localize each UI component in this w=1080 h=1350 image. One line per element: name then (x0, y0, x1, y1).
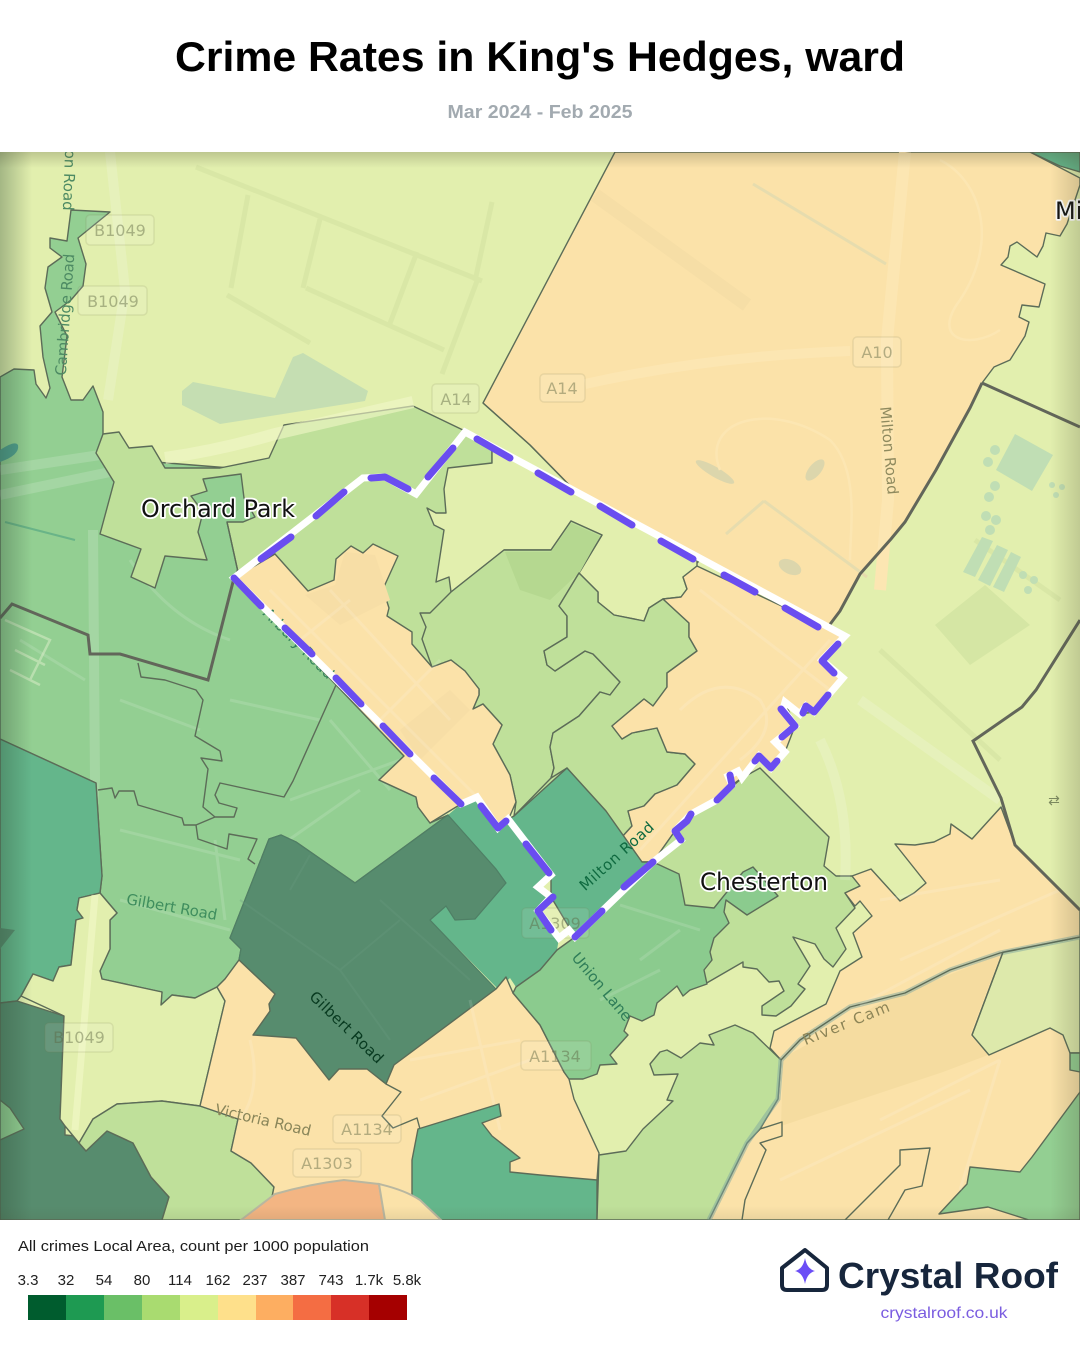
area: pale B1049 strip (21, 893, 225, 1143)
road shield: A1303: A1303 (301, 1154, 353, 1173)
area: Chesterton light-green block (653, 768, 860, 1016)
road labels (45, 215, 901, 1177)
area: south light-green block (79, 1101, 274, 1220)
area: northern ward pale lobe (427, 447, 697, 621)
place label: Chesterton: Chesterton (700, 868, 828, 896)
area: small medium-green patch (0, 1100, 24, 1140)
legend values: 1.7k (355, 1272, 384, 1289)
road shield: A1303 (293, 1149, 361, 1177)
road name: River Cam: River Cam (800, 998, 892, 1049)
legend values: 32 (58, 1272, 74, 1289)
legend values: 162 (205, 1272, 231, 1289)
boundary: thin line beside the A14 (483, 403, 579, 495)
subtitle: date range: Mar 2024 - Feb 2025 (448, 102, 632, 122)
legend (18, 1238, 422, 1320)
legend heading: All crimes Local Area, count per 1000 population (18, 1238, 369, 1255)
road shield: A14 east: A14 (546, 379, 578, 398)
legend values: 5.8k (393, 1272, 422, 1289)
map features: Union Lane street lines (600, 905, 700, 1000)
area: lower light-green block along the river (597, 1025, 781, 1220)
area: eastern ward orange block (612, 566, 845, 862)
area: teal west edge (0, 739, 102, 1003)
map base: lightest area (0, 152, 1080, 1220)
map feature: River Cam (709, 937, 1080, 1220)
road shield: A14 east (540, 374, 585, 402)
map features: fields and water in the north (108, 152, 1065, 760)
area: darker river meadow (781, 954, 1001, 1126)
area: south-east orange meadow block (709, 807, 1080, 1220)
panel: choropleth map (0, 149, 1080, 1220)
boundary: purple dashes (234, 439, 838, 937)
legend values (18, 1272, 422, 1289)
area: darker patch in central block (505, 523, 600, 600)
map features: east pale roads (820, 700, 1000, 880)
road name: top-left road fragment: on Road (59, 149, 79, 211)
area: south boundary line (382, 1084, 420, 1129)
place label: Orchard Park: Orchard Park (141, 495, 295, 523)
map features: western roads (0, 443, 400, 932)
area: Orchard Park light-green region (95, 405, 700, 664)
map features: south-east thin outlines (742, 952, 1003, 1220)
map features: B1049 road band (75, 895, 95, 1130)
map edge vignette (0, 152, 1080, 1220)
area: small green block at east edge (1070, 1053, 1080, 1072)
area: pale block east of the meadow (972, 937, 1080, 1055)
road name: Union Lane: Union Lane (568, 949, 636, 1025)
area: teal top-right corner (1030, 152, 1080, 172)
area: south-west dark block (0, 1001, 169, 1220)
legend values: 387 (280, 1272, 306, 1289)
map features: south orange roads (240, 1000, 530, 1130)
area: small dark patch west edge (0, 928, 15, 949)
road shield: A1134 south (333, 1115, 401, 1143)
area: south teal block (412, 1104, 597, 1220)
legend values: 114 (168, 1272, 192, 1289)
logo url: crystalroof.co.uk (880, 1305, 1009, 1322)
road shield: B1049 south (45, 1023, 113, 1052)
area: western ward orange block (234, 544, 516, 828)
icon: railway marker: ⇄ (1048, 792, 1060, 808)
legend colour scale (28, 1295, 407, 1320)
area: peach circle at the bottom edge (241, 1180, 385, 1220)
road shield: A10: A10 (861, 343, 893, 362)
road name: Victoria Road: Victoria Road (213, 1100, 313, 1140)
area: central light-green block in ward (530, 773, 560, 800)
road shield: A1309 (522, 908, 589, 938)
road name: Gilbert Road in dark block: Gilbert Road (306, 988, 387, 1067)
road shield: B1049 south: B1049 (53, 1028, 105, 1047)
area: dark green highest-band block (230, 815, 506, 1084)
area: south-east medium-green block (939, 1092, 1080, 1220)
road name: Arbury Road: Arbury Road (259, 604, 338, 683)
area: Union Lane medium-green block (513, 862, 778, 1079)
road shield: A10 (853, 337, 901, 367)
logo wordmark: Crystal Roof (838, 1255, 1059, 1296)
area: central teal block (508, 768, 653, 937)
boundary: thin internal lines west (98, 522, 336, 864)
road shield: A1134 centre: A1134 (529, 1047, 581, 1066)
ward boundary: King's Hedges (234, 432, 845, 938)
map features: eastern ward roads (640, 590, 830, 850)
map features: orange block texture (270, 552, 480, 800)
area: eastern light-green block (544, 573, 697, 837)
road name: Gilbert Road west: Gilbert Road (125, 890, 219, 924)
road shield: A14 west (432, 384, 479, 413)
icon: house with star (782, 1250, 827, 1290)
map features: north-east block roads and canals (585, 152, 1000, 590)
road shield: B1049 second (78, 286, 147, 315)
area: western medium-green region (0, 210, 448, 1005)
map features: dark block street lines (240, 900, 244, 903)
boundary: white casing (234, 432, 845, 938)
legend values: 80 (134, 1272, 150, 1289)
road shield: A1134 centre (521, 1041, 591, 1070)
road shield: B1049 second: B1049 (87, 292, 139, 311)
legend values: 3.3 (18, 1272, 38, 1289)
road shield: B1049 north: B1049 (94, 221, 146, 240)
area: north-east orange block (483, 152, 1080, 627)
area: south orange block (200, 960, 599, 1220)
road name: Milton Road south: Milton Road (576, 818, 658, 894)
road shield: A1134 south: A1134 (341, 1120, 393, 1139)
area: central green block (420, 521, 620, 816)
boundary: north-east thick ward line (0, 383, 1080, 910)
road name: Cambridge Road: Cambridge Road (52, 253, 78, 376)
legend values: 237 (242, 1272, 268, 1289)
map features: south-east roads (780, 880, 1060, 1190)
road name: Milton Road north: Milton Road (876, 406, 902, 495)
legend values: 743 (318, 1272, 344, 1289)
title: Crime Rates in King's Hedges, ward (175, 33, 905, 80)
area: orange inside the circle (379, 1184, 441, 1220)
logo: Crystal Roof (782, 1250, 1059, 1322)
road shield: B1049 north (86, 215, 154, 245)
legend values: 54 (96, 1272, 112, 1289)
area: teal block west of Milton Road (430, 797, 559, 989)
map features: A14 road band (165, 402, 413, 458)
road shield: A14 west: A14 (440, 390, 472, 409)
road shield: A1309: A1309 (529, 914, 581, 933)
map feature: River Cam outline (781, 937, 1080, 1060)
